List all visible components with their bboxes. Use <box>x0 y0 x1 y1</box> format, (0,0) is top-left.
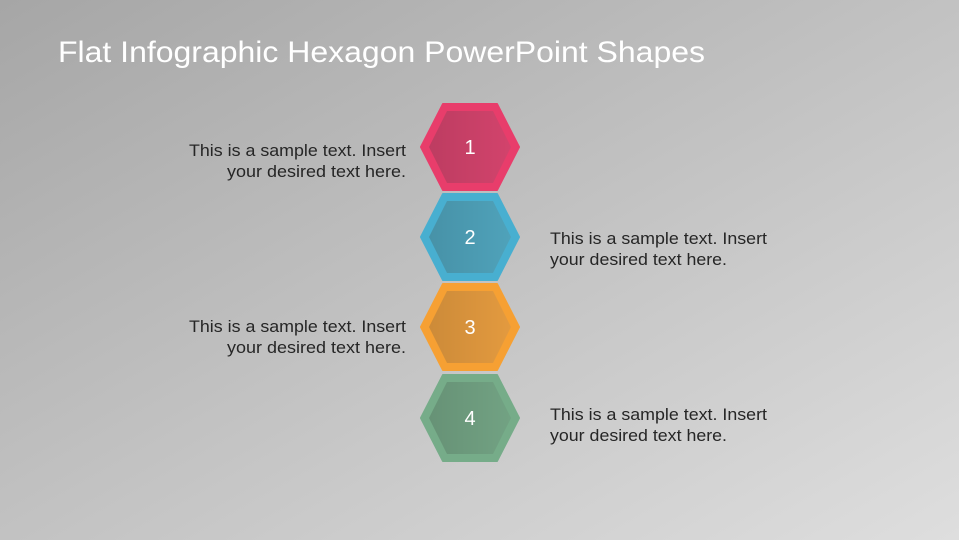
hexagon 1: 1 <box>464 137 476 159</box>
text block 2: your desired text here. <box>550 251 727 269</box>
text block 4: This is a sample text. Insert <box>550 406 767 424</box>
hexagon 2: 2 <box>464 227 476 249</box>
text block 1: your desired text here. <box>227 163 406 181</box>
hexagon 4 <box>421 375 519 461</box>
text block 1: This is a sample text. Insert <box>189 142 406 160</box>
text block 3: This is a sample text. Insert <box>189 318 406 336</box>
hexagon 2 <box>421 194 519 280</box>
title: Flat Infographic Hexagon PowerPoint Shapes <box>58 36 705 69</box>
text block 3: your desired text here. <box>227 339 406 357</box>
text block 2: This is a sample text. Insert <box>550 230 767 248</box>
text block 1 <box>189 142 406 181</box>
text block 4: your desired text here. <box>550 427 727 445</box>
text block 2 <box>550 230 767 269</box>
hexagon 4: 4 <box>464 408 476 430</box>
hexagon 3: 3 <box>464 317 476 339</box>
hexagon 3 <box>421 284 519 370</box>
hexagon 1 <box>421 104 519 190</box>
text block 3 <box>189 318 406 357</box>
text block 4 <box>550 406 767 445</box>
